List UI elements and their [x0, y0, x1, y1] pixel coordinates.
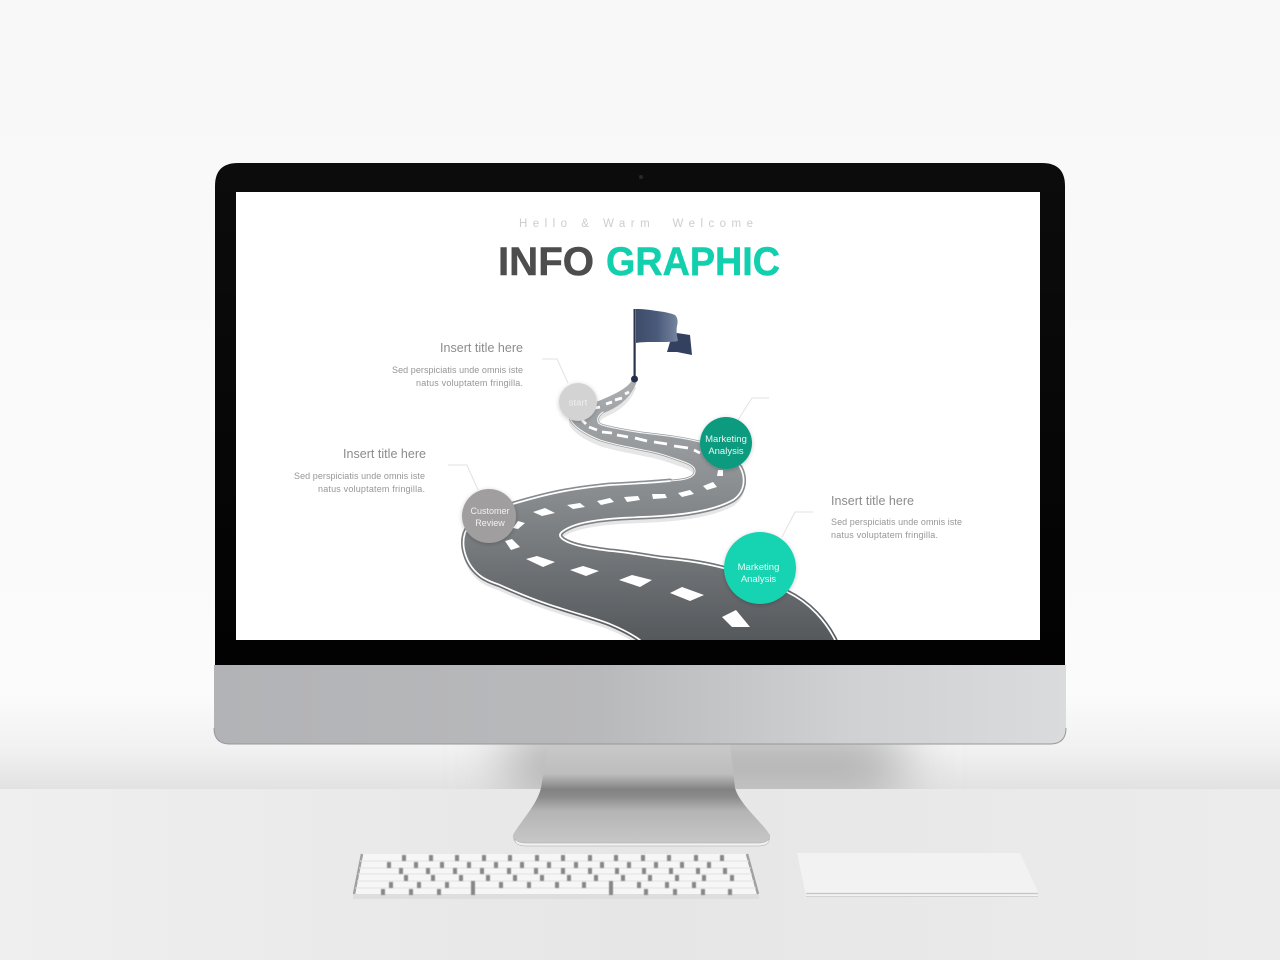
road lane dashes, lower: [505, 470, 750, 627]
leader lines: [448, 359, 813, 537]
circle: customer review: Customer: [470, 506, 510, 516]
flag back fold: [667, 333, 692, 355]
camera: [639, 175, 643, 179]
road edge lines: [464, 403, 835, 640]
flag pole base: [631, 376, 638, 382]
text block: right: natus voluptatem fringilla.: [831, 530, 938, 540]
monitor: [214, 163, 1066, 744]
circle: marketing analysis bright: [724, 532, 796, 604]
circle: start: [559, 383, 597, 421]
trackpad: [797, 853, 1038, 896]
road lane dashes, upper: [582, 392, 700, 453]
circle: marketing analysis dark: Marketing: [705, 434, 747, 445]
flag: [631, 309, 692, 382]
circle: marketing analysis bright: Analysis: [741, 574, 776, 585]
keyboard: [353, 854, 759, 899]
road surface: [464, 381, 835, 640]
text block: top left: Insert title here: [440, 341, 523, 355]
circle: marketing analysis bright: Marketing: [738, 562, 779, 573]
text block: top left: natus voluptatem fringilla.: [416, 378, 523, 388]
flag front: [636, 309, 678, 343]
text block: right: Insert title here: [831, 494, 914, 508]
text block: right: Sed perspiciatis unde omnis iste: [831, 517, 962, 527]
text block: middle left: Insert title here: [343, 447, 426, 461]
title word: INFO: INFO: [498, 240, 594, 284]
road ground shadow: [464, 386, 744, 640]
circle: marketing analysis dark: [700, 417, 752, 469]
circle: marketing analysis dark: Analysis: [708, 446, 744, 457]
road illustration: [464, 381, 835, 645]
title word: GRAPHIC: GRAPHIC: [606, 240, 780, 284]
subtitle: Hello & Warm Welcome: [519, 218, 753, 230]
monitor bezel: [215, 163, 1065, 665]
stand shadow on wall: [484, 744, 926, 789]
desk surface: [0, 789, 1280, 960]
circle: customer review: Review: [475, 518, 505, 528]
monitor chin: [214, 665, 1066, 744]
monitor stand: [513, 744, 770, 846]
circle: customer review: [462, 489, 516, 543]
flag pole: [634, 309, 636, 380]
text block: middle left: natus voluptatem fringilla.: [318, 484, 425, 494]
text block: middle left: [294, 447, 426, 494]
circle: start: start: [569, 398, 588, 408]
screen: [236, 192, 1040, 640]
text block: top left: [392, 341, 523, 388]
text block: right: [831, 494, 962, 540]
text block: top left: Sed perspiciatis unde omnis iste: [392, 365, 523, 375]
text block: middle left: Sed perspiciatis unde omnis iste: [294, 471, 425, 481]
title: [498, 240, 780, 284]
